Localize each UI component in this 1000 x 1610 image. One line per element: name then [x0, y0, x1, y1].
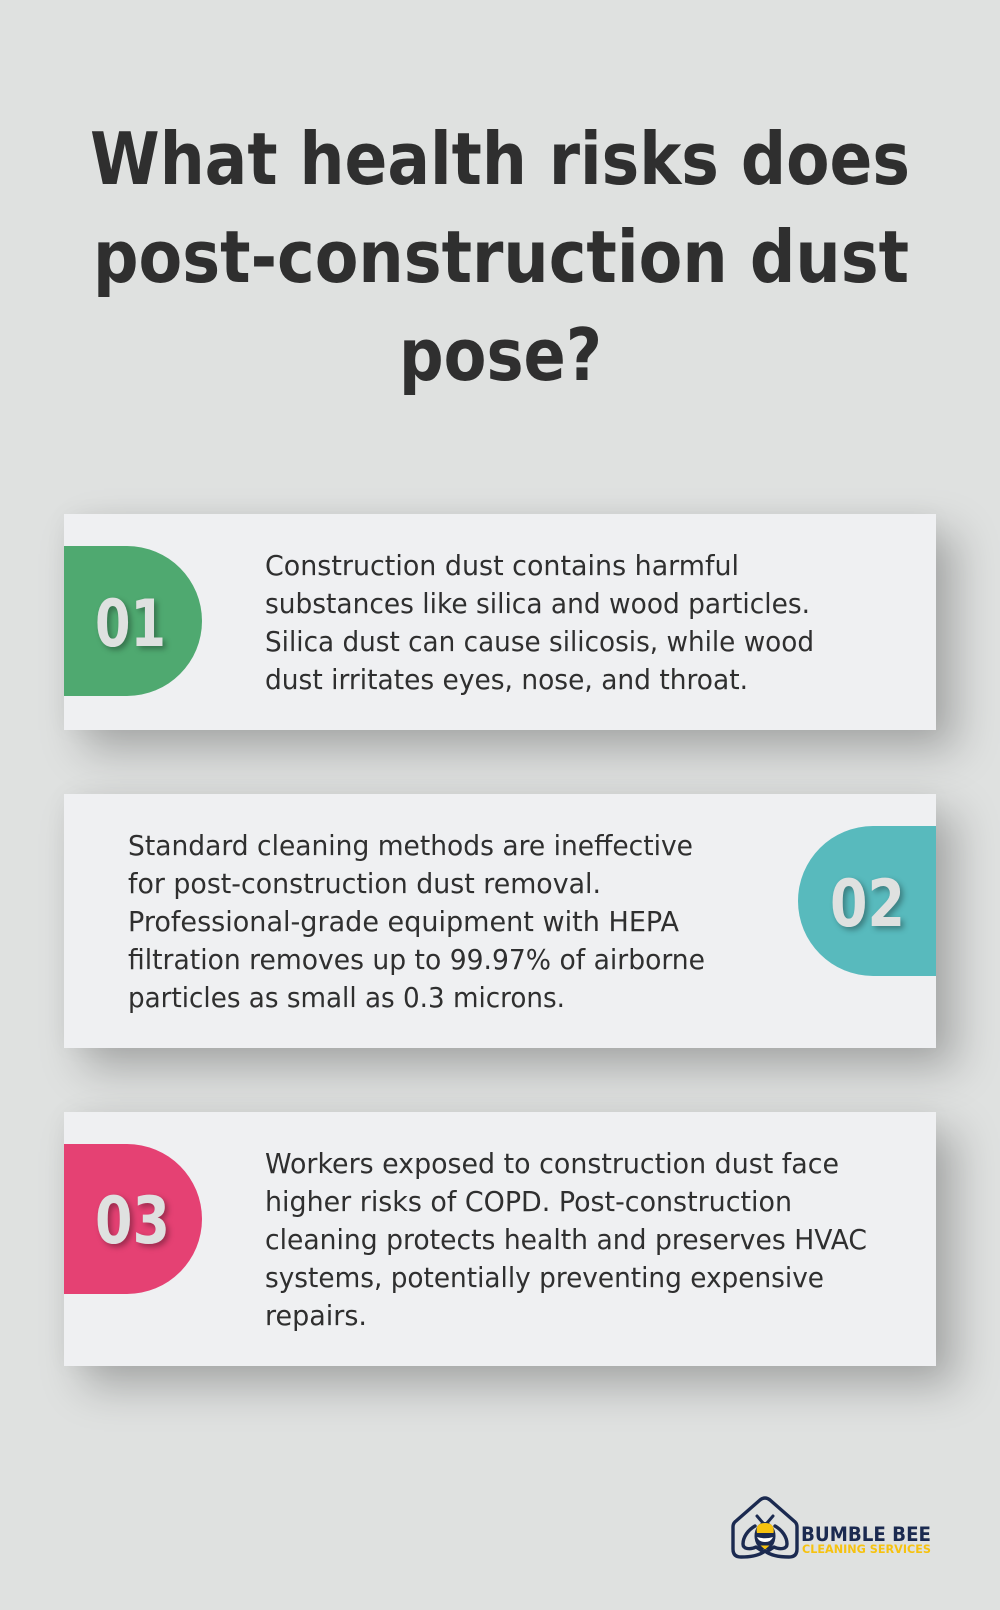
text: card 02 description — [128, 829, 705, 1014]
text: card 02 description: Standard cleaning methods are ineffective — [128, 829, 693, 862]
text: card 03 description: higher risks of COPD. Post-construction — [265, 1185, 792, 1218]
number badge 01: 01 — [95, 587, 166, 662]
text: card 01 description — [265, 549, 814, 696]
title: pose? — [399, 313, 602, 397]
number badge 02 — [798, 826, 936, 976]
panel: card 01 — [64, 514, 936, 730]
text: card 03 description: repairs. — [265, 1299, 367, 1332]
number badge 03: 03 — [95, 1184, 170, 1259]
icon: house outline with bee — [733, 1498, 797, 1557]
text: card 02 description: filtration removes up to 99.97% of airborne — [128, 943, 705, 976]
title — [90, 117, 910, 397]
text: card 01 description: Construction dust contains harmful — [265, 549, 739, 582]
text: card 03 description: systems, potentially preventing expensive — [265, 1261, 824, 1294]
text: card 02 description: Professional-grade equipment with HEPA — [128, 905, 679, 938]
text: card 01 description: dust irritates eyes, nose, and throat. — [265, 663, 748, 696]
text: card 02 description: particles as small as 0.3 microns. — [128, 981, 565, 1014]
number badge 03 — [64, 1144, 202, 1294]
panel: card 02 — [64, 794, 936, 1048]
panel: card 03 — [64, 1112, 936, 1366]
text: card 01 description: substances like silica and wood particles. — [265, 587, 810, 620]
logo wordmark: CLEANING SERVICES — [802, 1542, 931, 1556]
logo: Bumble Bee Cleaning Services — [731, 1496, 931, 1559]
number badge 01 — [64, 546, 202, 696]
number badge 02: 02 — [830, 867, 905, 942]
text: card 01 description: Silica dust can cause silicosis, while wood — [265, 625, 814, 658]
text: card 03 description: cleaning protects health and preserves HVAC — [265, 1223, 867, 1256]
text: card 03 description — [265, 1147, 867, 1332]
text: card 02 description: for post-construction dust removal. — [128, 867, 601, 900]
logo wordmark: BUMBLE BEE — [801, 1523, 931, 1546]
logo wordmark — [801, 1523, 931, 1556]
text: card 03 description: Workers exposed to construction dust face — [265, 1147, 839, 1180]
